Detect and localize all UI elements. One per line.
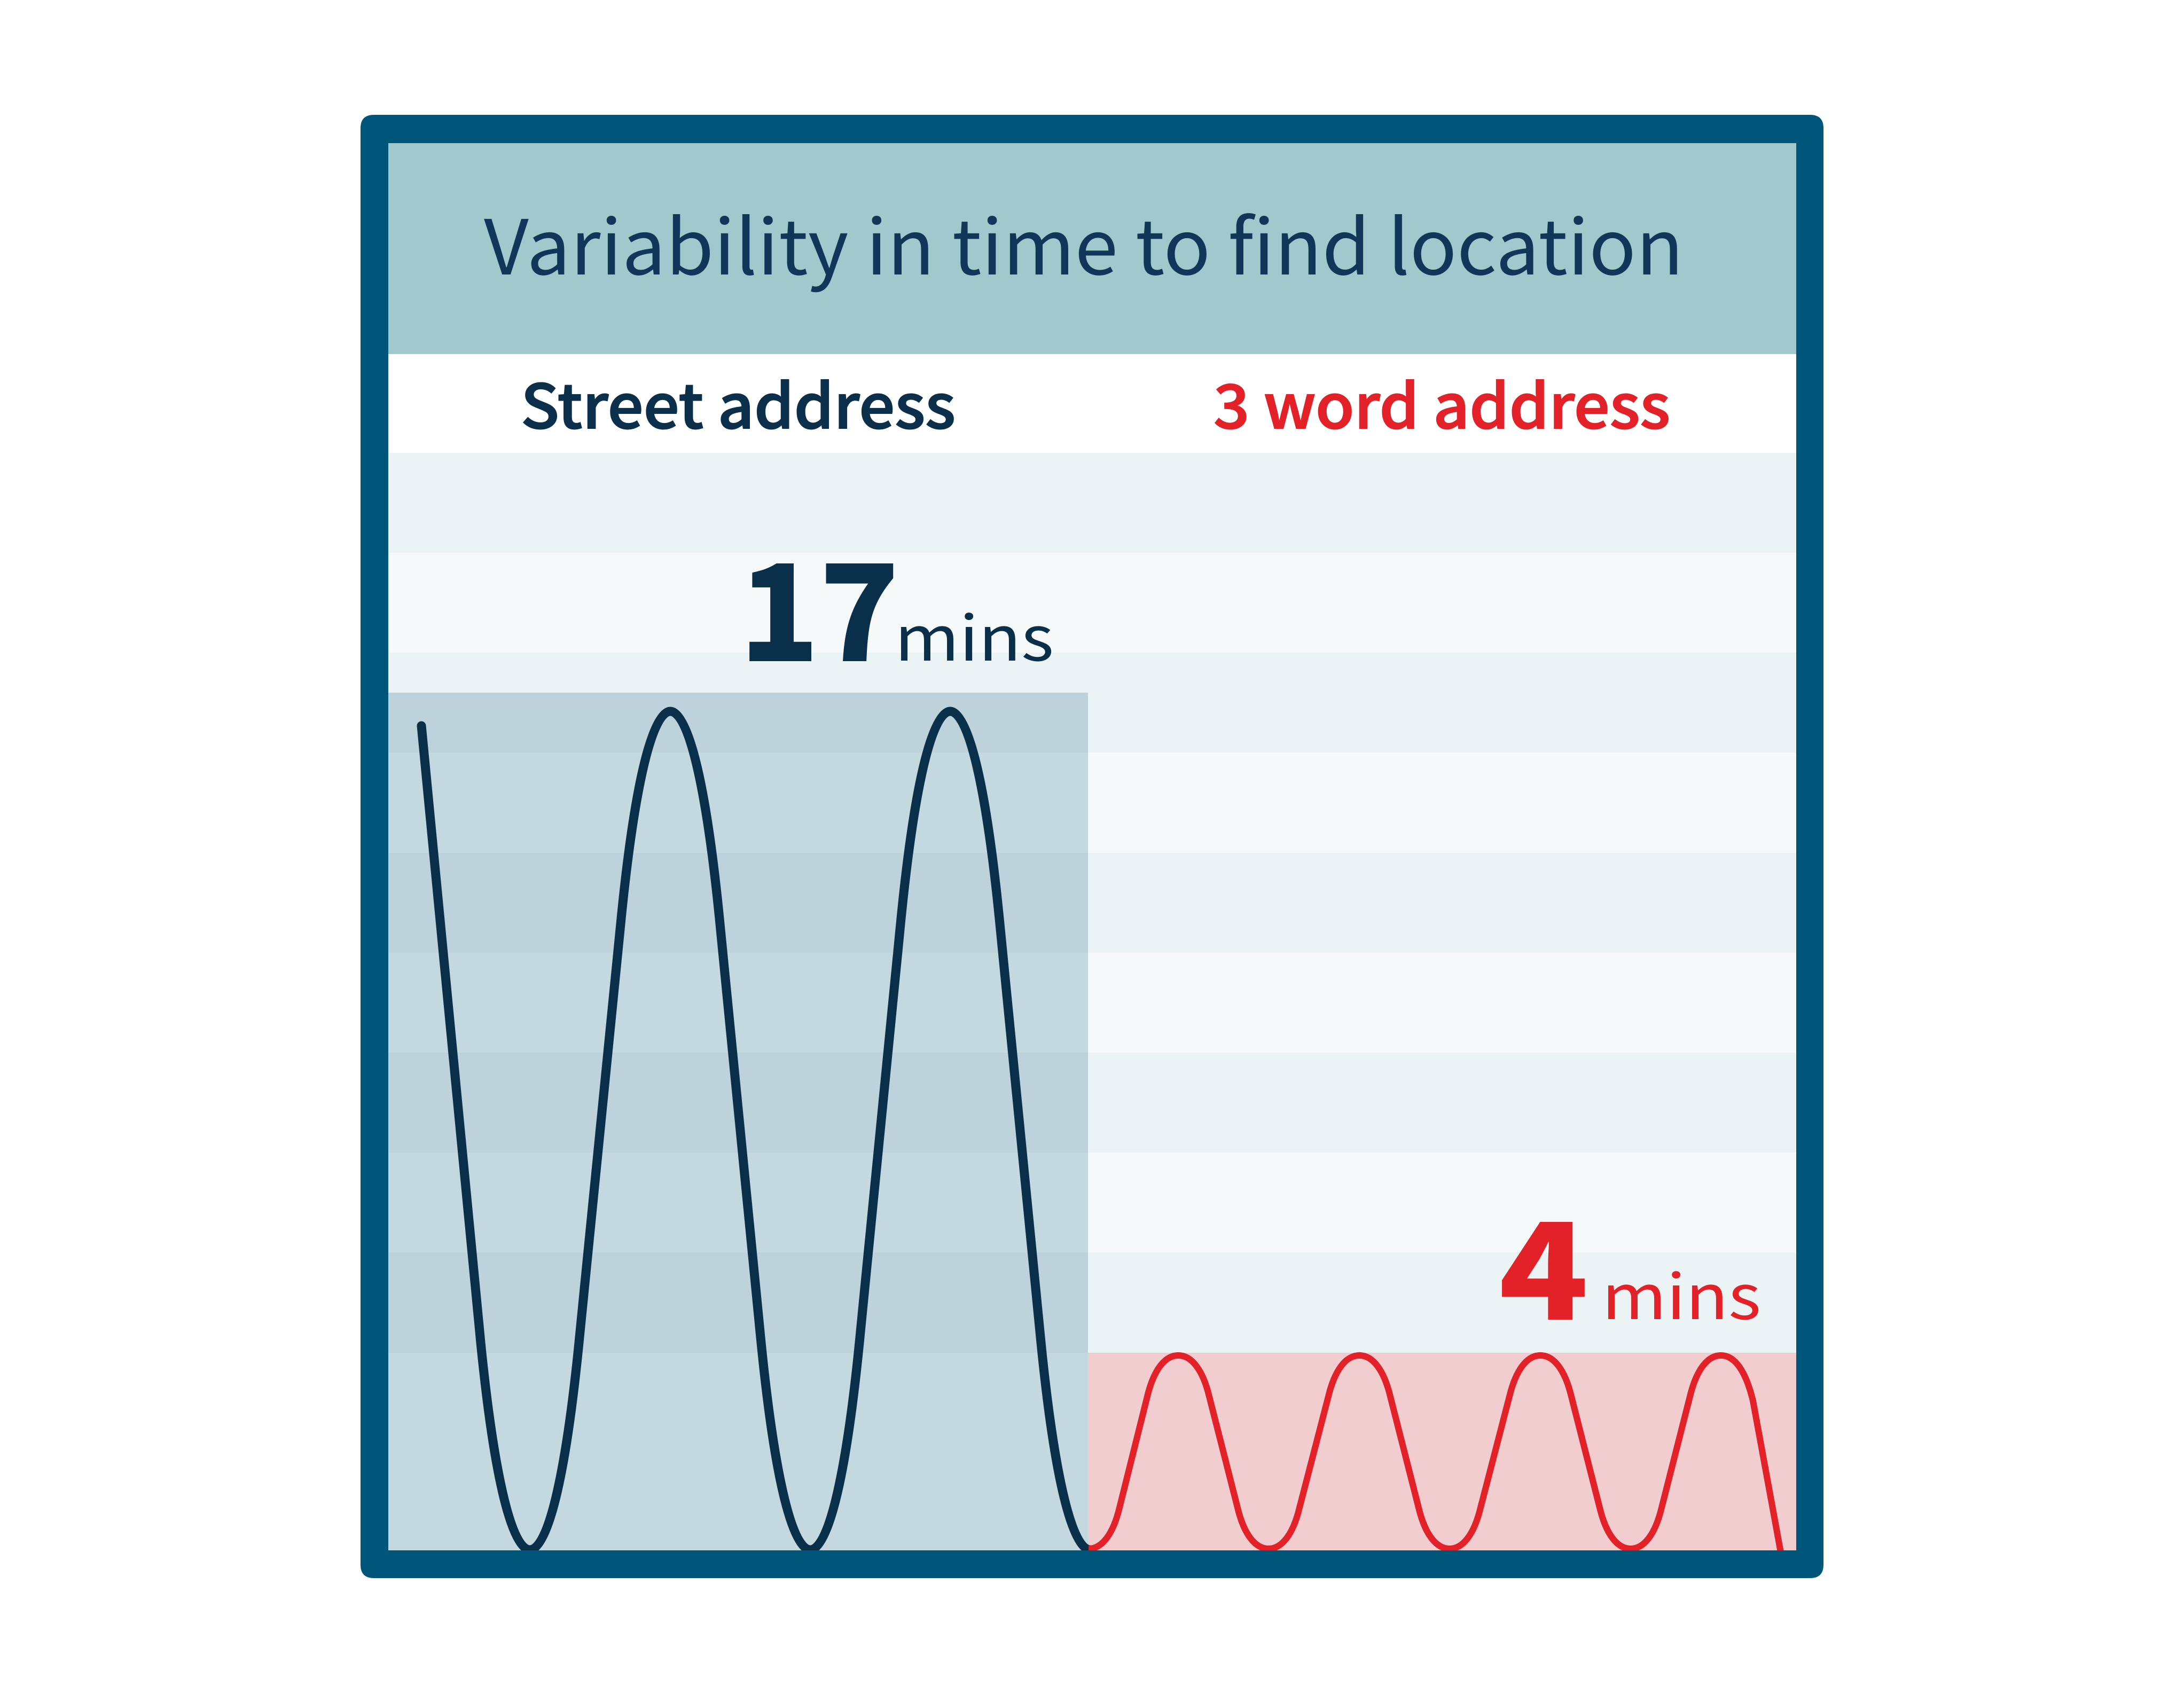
value label: 17 mins [739, 505, 1054, 700]
header band [388, 143, 1796, 354]
column header: street address: Street address [521, 358, 956, 446]
3 word address bar [1088, 1353, 1796, 1550]
value label: 4 mins: mins [1602, 1248, 1761, 1337]
chart frame [361, 115, 1823, 1578]
striped chart background [388, 453, 1796, 1550]
value label: 4 mins [1499, 1164, 1761, 1359]
value label: 4 mins: 4 [1499, 1164, 1588, 1359]
3 word address variability line [1089, 1355, 1781, 1555]
street address variability line [421, 711, 1090, 1550]
value label: 17 mins: 17 [739, 505, 899, 700]
street address bar [388, 693, 1088, 1550]
column header: 3 word address: 3 word address [1214, 358, 1670, 446]
value label: 17 mins: mins [895, 589, 1054, 679]
title: Variability in time to find location [484, 186, 1684, 296]
